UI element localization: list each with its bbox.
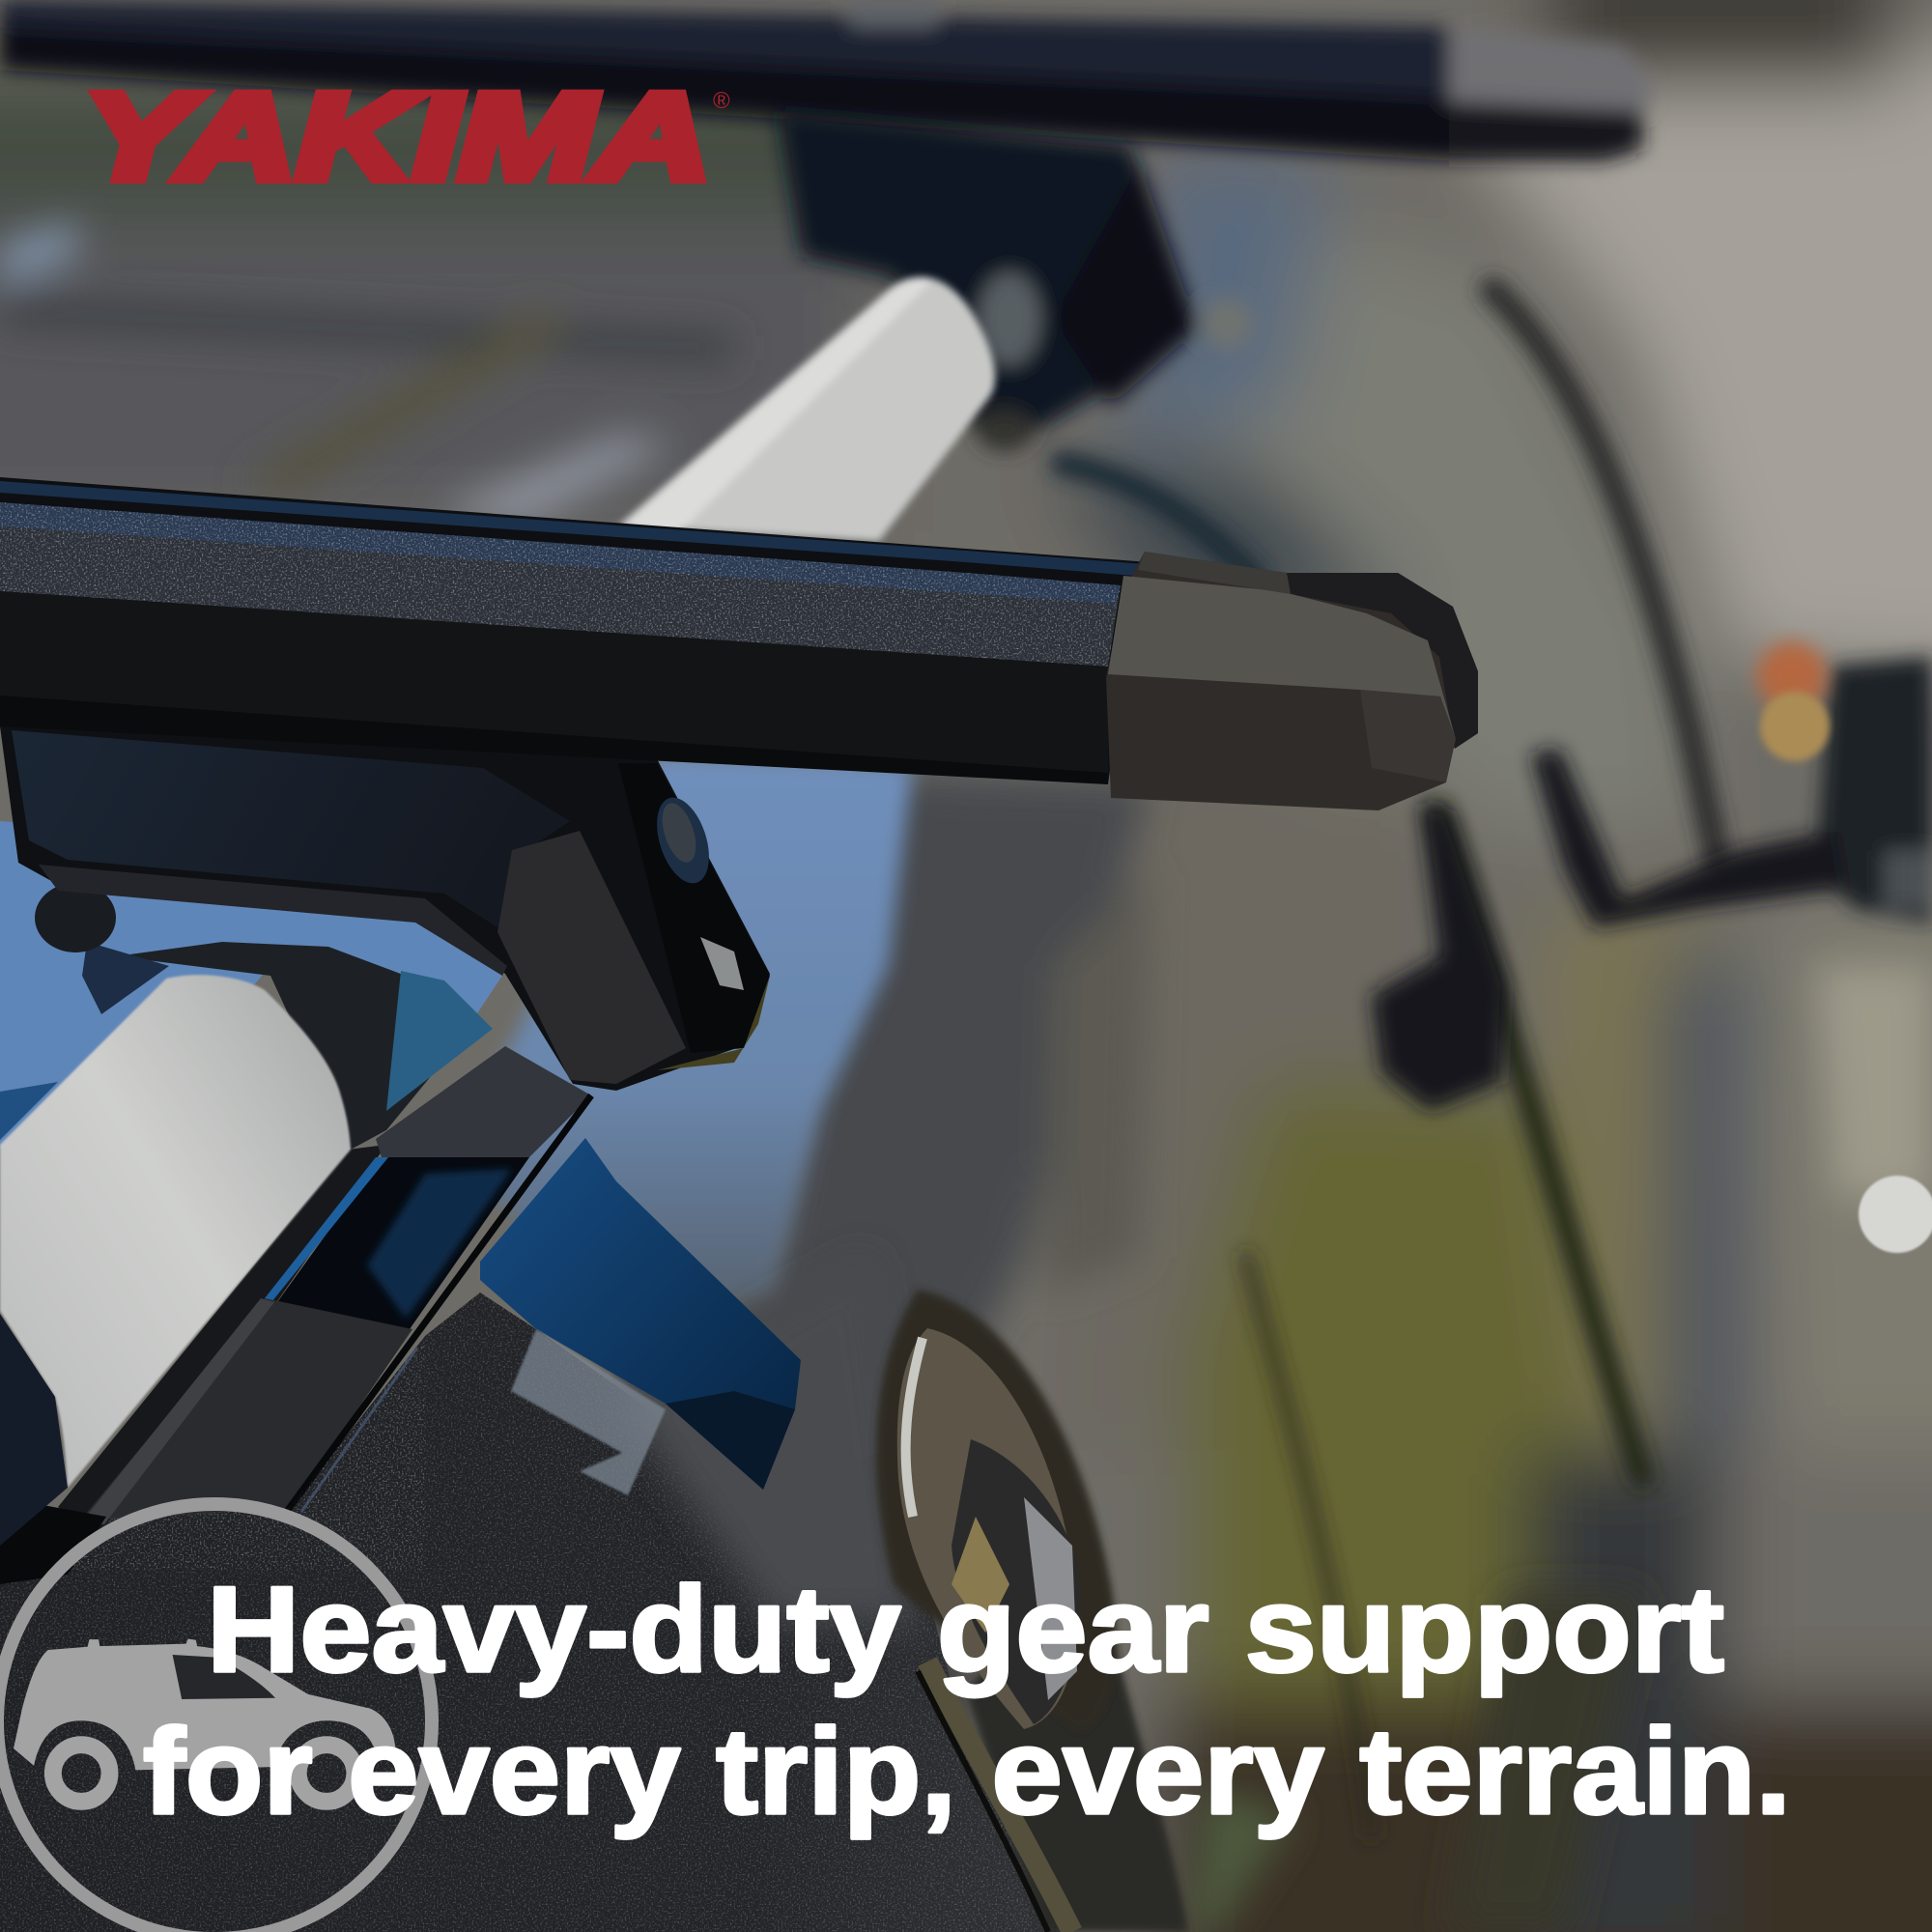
dark fender line and window post <box>1063 290 1719 1835</box>
rear rack foot <box>778 111 1252 451</box>
bar end cap <box>1106 552 1478 810</box>
icon: SUV silhouette <box>14 1638 395 1802</box>
icon ring <box>0 1504 432 1932</box>
logo: YAKIMA wordmark <box>83 68 730 205</box>
front white tube and dark sleeve <box>0 883 493 1546</box>
lower blue patch and black trim <box>0 821 591 1584</box>
icon: vehicle in circle <box>0 1504 432 1932</box>
deep blue reflection patch <box>480 1138 801 1495</box>
speckled dark lower door panel <box>0 1256 1063 1932</box>
registered mark: ® <box>713 88 730 114</box>
blue door glass reflection <box>454 753 913 1314</box>
front crossbar <box>0 477 1150 784</box>
rear white tube <box>618 277 995 541</box>
headline line 2: for every trip, every terrain. <box>143 1703 1791 1839</box>
headline line 1: Heavy-duty gear support <box>207 1561 1724 1697</box>
front rack foot <box>0 702 770 1091</box>
wordmark text: YAKIMA <box>83 68 711 205</box>
side mirror and bokeh lights <box>1372 641 1932 1253</box>
dark grey door surface <box>580 773 1150 1642</box>
door handle <box>876 1290 1188 1932</box>
rear crossbar <box>0 0 1652 161</box>
headline <box>143 1561 1791 1839</box>
